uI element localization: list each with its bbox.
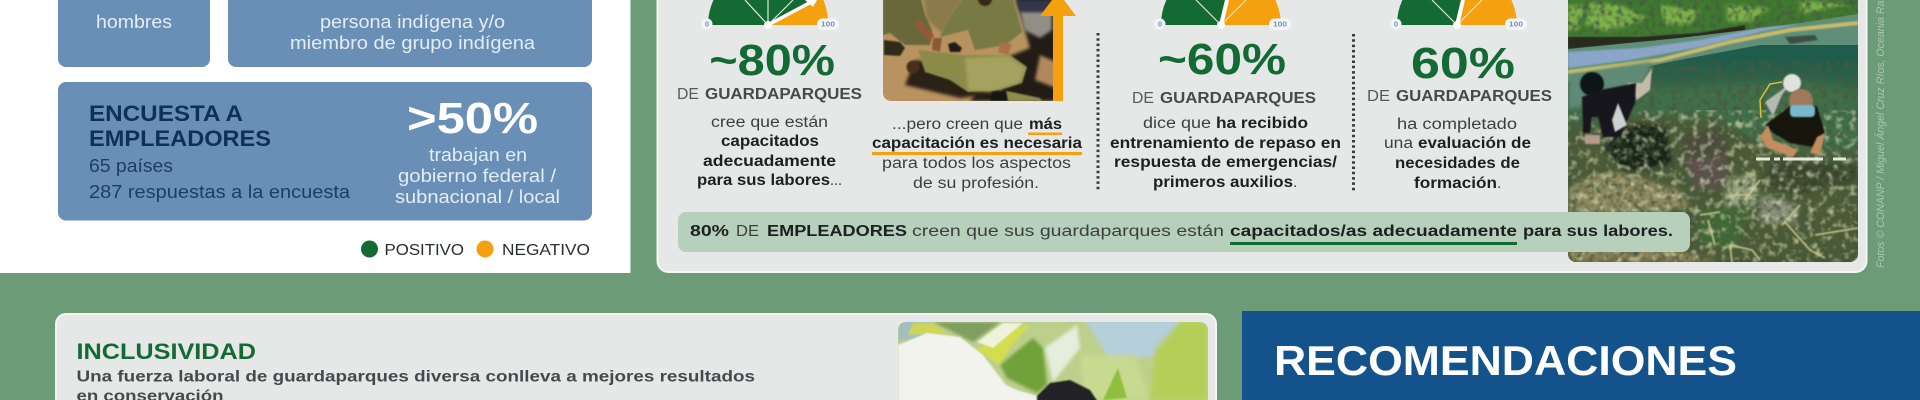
text: feel adequately trained: adecuadamente [703, 153, 836, 170]
panel: demographics survey [0, 0, 630, 273]
box: employer survey: EMPLEADORES [89, 126, 271, 151]
panel: recommendations [1242, 311, 1920, 400]
text: refresher training [1110, 115, 1341, 191]
box: employer survey: trabajan en [429, 145, 527, 165]
water surface [1568, 14, 1858, 82]
stat: 60 percent [1367, 39, 1552, 105]
heading: recommendations: RECOMENDACIONES [1274, 337, 1737, 384]
text: refresher training: respuesta de emergencias/ [1114, 154, 1338, 171]
callout: employers: DE [736, 223, 759, 240]
gauge: 80 percent: 0 [705, 20, 709, 28]
stat: about 80 percent: ~80% [709, 36, 835, 85]
callout: employers: 80% [690, 223, 729, 240]
text: feel adequately trained [697, 114, 842, 189]
centre soldier [940, 0, 1022, 50]
text: needs assessment: formación [1414, 175, 1497, 192]
text: refresher training: . [1293, 174, 1297, 191]
callout: employers: EMPLEADORES [767, 223, 907, 240]
stat: about 60 percent: GUARDAPARQUES [1160, 90, 1316, 107]
box: employer survey: gobierno federal / [398, 166, 556, 186]
text: more training needed: ...pero creen que [892, 116, 1023, 133]
stat: 60 percent: DE [1367, 88, 1390, 105]
text: feel adequately trained: para sus labores [697, 172, 830, 189]
stat: about 60 percent: ~60% [1158, 35, 1286, 84]
photo: divers [1568, 0, 1858, 262]
box: men [58, 0, 210, 67]
text: refresher training: dice que [1143, 115, 1211, 132]
diver left [1580, 68, 1652, 144]
text: more training needed: capacitación es necesaria [872, 135, 1082, 152]
text: refresher training: entrenamiento de repaso en [1110, 135, 1341, 152]
box: employer survey: 65 países [89, 156, 173, 176]
stat: about 80 percent: DE [677, 86, 699, 103]
text: needs assessment: evaluación de [1418, 135, 1531, 152]
box: employer survey: >50% [407, 94, 538, 143]
gauge: 80 percent: 100 [821, 20, 835, 29]
text: needs assessment: una [1384, 135, 1413, 152]
gauge: 60 percent refresher [1154, 0, 1291, 30]
text: more training needed: más [1029, 116, 1062, 133]
stat: about 60 percent: DE [1132, 90, 1154, 107]
callout: employers [678, 212, 1690, 252]
top-left soldier [883, 0, 932, 45]
box: employer survey: 287 respuestas a la encuesta [89, 182, 351, 202]
text: refresher training: primeros auxilios [1153, 174, 1293, 191]
text: refresher training: ha recibido [1216, 115, 1308, 132]
box: employer survey [58, 82, 592, 220]
box: men: hombres [96, 12, 172, 32]
lying soldier [903, 58, 978, 100]
legend: NEGATIVO [502, 242, 590, 259]
text: feel adequately trained: capacitados [721, 133, 819, 150]
box: employer survey: ENCUESTA A [89, 101, 243, 126]
legend: POSITIVO [384, 242, 464, 259]
panel: inclusivity [56, 314, 1216, 400]
photo: ranger with hat [898, 320, 1208, 400]
heading: inclusivity: INCLUSIVIDAD [76, 339, 256, 364]
gauge: 60 percent needs assessment [1390, 0, 1527, 30]
arrow: up [1040, 0, 1076, 101]
lake bed [1636, 80, 1856, 148]
text: needs assessment: ha completado [1397, 116, 1517, 133]
diver right [1756, 74, 1846, 159]
box: indigenous [228, 0, 592, 67]
text: needs assessment [1384, 116, 1531, 192]
text: feel adequately trained: ... [830, 172, 842, 189]
stat: about 60 percent [1132, 35, 1316, 107]
text: more training needed: de su profesión. [913, 175, 1039, 192]
text: more training needed: para todos los aspectos [882, 155, 1071, 172]
gauge: 60 percent needs assessment: 100 [1509, 20, 1523, 29]
stat: 60 percent: GUARDAPARQUES [1396, 88, 1552, 105]
text: feel adequately trained: cree que están [711, 114, 828, 131]
photo: rangers training [883, 0, 1056, 101]
box: indigenous: miembro de grupo indígena [290, 33, 536, 53]
box: indigenous: persona indígena y/o [320, 12, 505, 32]
box: employer survey: subnacional / local [395, 187, 560, 207]
stat: 60 percent: 60% [1411, 39, 1515, 88]
panel: training [658, 0, 1866, 272]
text: needs assessment: . [1497, 175, 1501, 192]
gauge: 60 percent refresher: 100 [1273, 20, 1287, 29]
foliage [1568, 0, 1858, 37]
callout: employers: capacitados/as adecuadamente [1230, 223, 1517, 240]
text: diverse workforce [76, 368, 755, 400]
callout: employers: creen que sus guardaparques están [912, 223, 1224, 240]
stat: about 80 percent [677, 36, 862, 103]
callout: employers: para sus labores. [1523, 223, 1673, 240]
text: needs assessment: necesidades de [1395, 155, 1520, 172]
text: more training needed [872, 116, 1082, 192]
gauge: 80 percent [702, 0, 839, 30]
text: diverse workforce: Una fuerza laboral de guardaparques diversa conlleva a mejores resultados [76, 368, 755, 386]
legend [361, 240, 590, 259]
gauge: 60 percent refresher: 0 [1158, 20, 1162, 28]
stat: about 80 percent: GUARDAPARQUES [705, 86, 862, 103]
gauge: 60 percent needs assessment: 0 [1394, 20, 1398, 28]
